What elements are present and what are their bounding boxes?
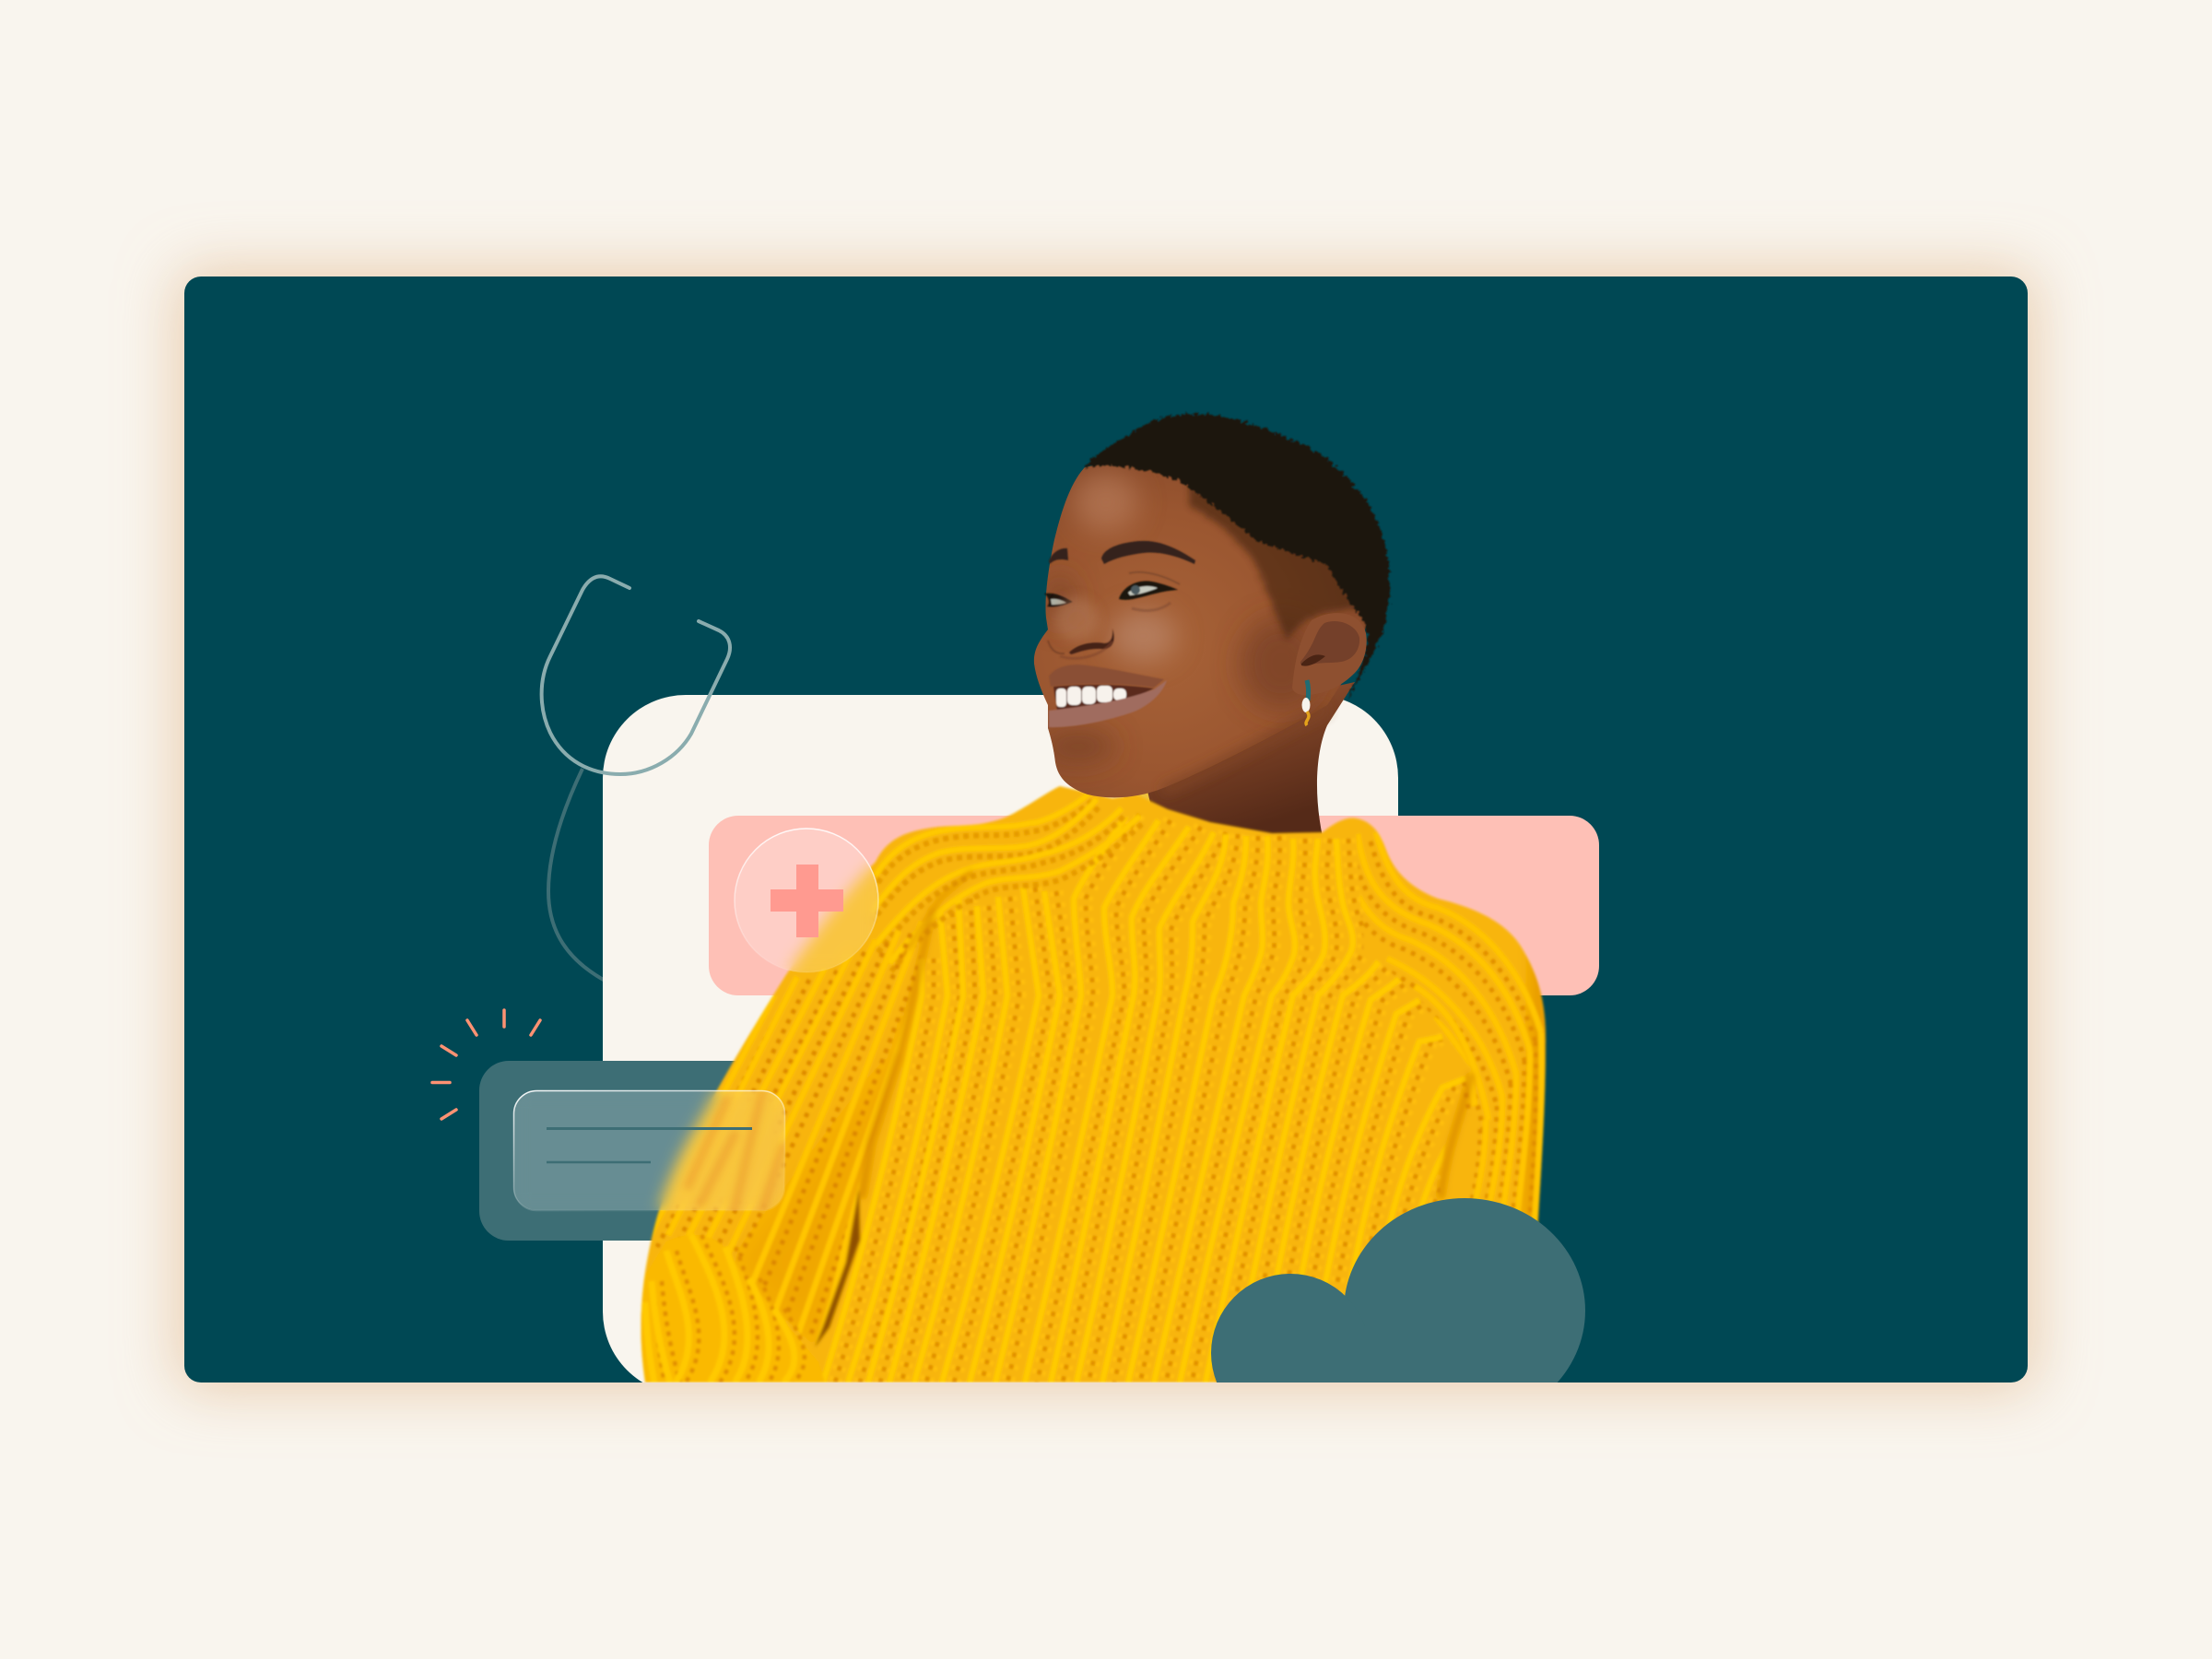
eyebrows bbox=[1049, 541, 1195, 564]
nose bbox=[1048, 597, 1114, 658]
collar gap sliver bbox=[1120, 791, 1152, 811]
face bbox=[1034, 452, 1382, 797]
fold shadows bbox=[862, 871, 1471, 1198]
glass circle bbox=[735, 828, 878, 972]
hair bbox=[1085, 414, 1390, 702]
big eye bbox=[1119, 572, 1180, 610]
panel: teal card behind glass bbox=[479, 1061, 922, 1241]
icon: medical cross bbox=[771, 865, 843, 937]
foreground details bbox=[512, 828, 1585, 1382]
inner ear bbox=[1300, 621, 1359, 666]
photo figure: smiling woman in yellow sweater bbox=[640, 411, 1548, 1382]
ear bbox=[1292, 613, 1367, 695]
glass card outline bbox=[514, 1091, 785, 1211]
neck bbox=[1106, 682, 1355, 837]
glass card bbox=[513, 1090, 784, 1210]
sweater bbox=[636, 786, 1558, 1382]
panel: cream rounded panel bbox=[603, 695, 1398, 1394]
text placeholder lines bbox=[547, 1128, 752, 1162]
icon: sparkle rays bbox=[432, 1010, 540, 1119]
jaw to neck blend bbox=[1163, 708, 1327, 791]
blurred sweater streaks in glass card bbox=[687, 1088, 783, 1217]
glass circle outline bbox=[735, 829, 878, 972]
sweater knit texture bbox=[636, 793, 1558, 1382]
cuff bbox=[636, 1235, 825, 1382]
left shoulder ribs bbox=[871, 793, 1142, 971]
hair stipple fade bbox=[1189, 484, 1359, 641]
mouth bbox=[1049, 665, 1167, 727]
face shading bbox=[1041, 473, 1323, 763]
icon: stethoscope lower tube bbox=[548, 769, 608, 982]
body ribs bbox=[823, 814, 1477, 1382]
right sleeve ribs bbox=[1357, 830, 1546, 1220]
panel: pink bar bbox=[709, 816, 1599, 995]
icon: stethoscope upper tube bbox=[542, 576, 730, 774]
head bbox=[1034, 414, 1390, 797]
panel: dark teal card with glow bbox=[184, 276, 2028, 1382]
facial features bbox=[1044, 541, 1195, 727]
small eye bbox=[1044, 594, 1073, 607]
teeth bbox=[1056, 686, 1126, 707]
sweater silhouette bbox=[641, 786, 1546, 1382]
left sleeve ribs bbox=[653, 921, 922, 1346]
cuff crease bbox=[815, 1189, 860, 1347]
cloud shape bbox=[1211, 1198, 1585, 1432]
earring bbox=[1301, 680, 1311, 725]
